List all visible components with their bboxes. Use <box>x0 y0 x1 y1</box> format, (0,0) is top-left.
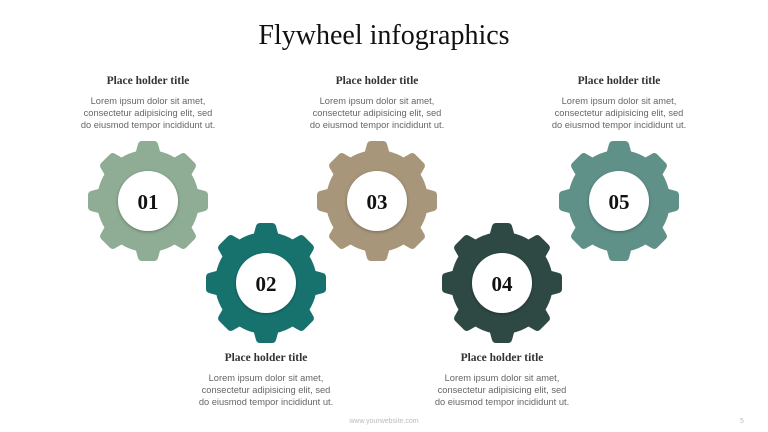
text block 03: Lorem ipsum dolor sit amet, <box>320 96 434 106</box>
text block 05: consectetur adipisicing elit, sed <box>555 108 683 118</box>
text block 04: do eiusmod tempor incididunt ut. <box>435 397 569 407</box>
text block 03: Place holder title <box>336 75 418 87</box>
gear 02 <box>206 223 326 343</box>
text block 04: consectetur adipisicing elit, sed <box>438 385 566 395</box>
text block 02: consectetur adipisicing elit, sed <box>202 385 330 395</box>
gear 05 <box>559 141 679 261</box>
title: Flywheel infographics <box>258 20 510 51</box>
text block 03 <box>310 75 444 130</box>
text block 05: Place holder title <box>578 75 660 87</box>
text block 02: Place holder title <box>225 352 307 364</box>
text block 02 <box>199 352 333 407</box>
text block 05 <box>552 75 686 130</box>
text block 01: do eiusmod tempor incididunt ut. <box>81 120 215 130</box>
text block 04: Place holder title <box>461 352 543 364</box>
text block 03: consectetur adipisicing elit, sed <box>313 108 441 118</box>
text block 01: Lorem ipsum dolor sit amet, <box>91 96 205 106</box>
text block 05: do eiusmod tempor incididunt ut. <box>552 120 686 130</box>
text block 01: Place holder title <box>107 75 189 87</box>
gear 01 <box>88 141 208 261</box>
gear 03: 03 <box>366 190 388 214</box>
page number: 5 <box>740 418 744 425</box>
text block 04 <box>435 352 569 407</box>
text block 02: Lorem ipsum dolor sit amet, <box>209 373 323 383</box>
text block 03: do eiusmod tempor incididunt ut. <box>310 120 444 130</box>
text block 04: Lorem ipsum dolor sit amet, <box>445 373 559 383</box>
gear 04: 04 <box>492 272 513 296</box>
text block 05: Lorem ipsum dolor sit amet, <box>562 96 676 106</box>
gear 05: 05 <box>608 190 630 214</box>
footer url: www.yourwebsite.com <box>349 418 419 425</box>
gear 03 <box>317 141 437 261</box>
gear 02: 02 <box>256 272 276 296</box>
text block 01 <box>81 75 215 130</box>
text block 01: consectetur adipisicing elit, sed <box>84 108 212 118</box>
gear 01: 01 <box>138 190 158 214</box>
text block 02: do eiusmod tempor incididunt ut. <box>199 397 333 407</box>
gear 04 <box>442 223 562 343</box>
